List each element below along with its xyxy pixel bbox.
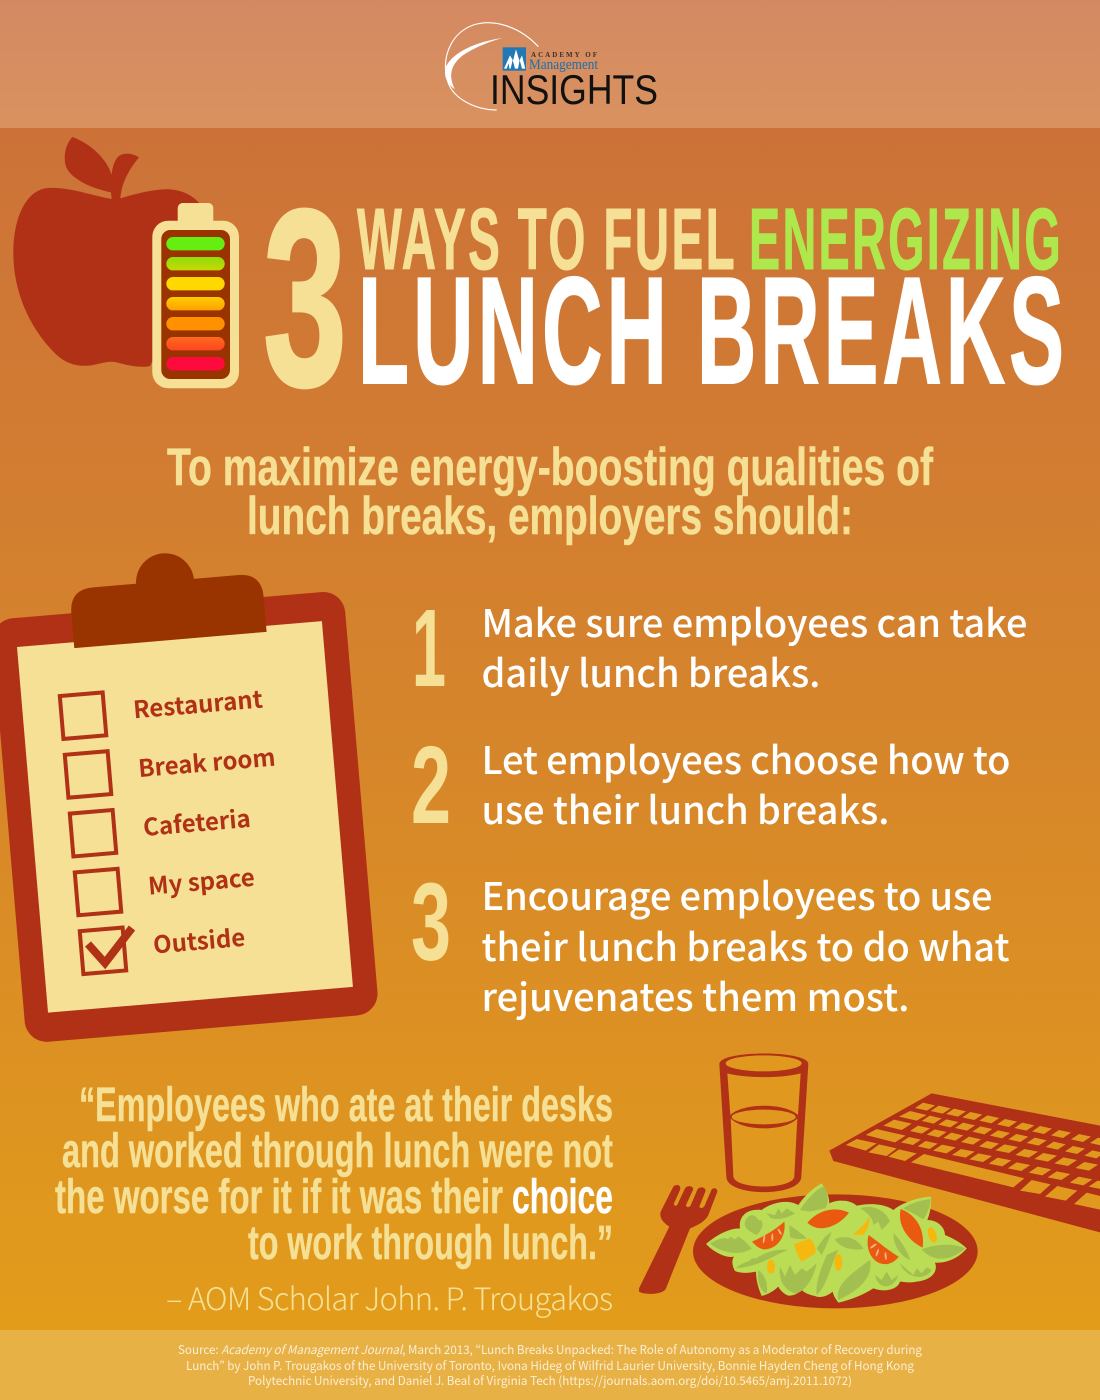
panel: clipboard checklist: Break room (137, 738, 277, 784)
icon: apple (13, 137, 200, 367)
illustration: lunch at desk (639, 1053, 1100, 1308)
top header band (0, 0, 1100, 128)
list item 1: Make sure employees can take (482, 593, 1028, 648)
source citation: Lunch” by John P. Trougakos of the University of Toronto, Ivona Hideg of Wilfrid Laurier University, Bonnie Hayden Cheng of Hong Kong (186, 1357, 914, 1374)
list item 1 (482, 593, 1028, 698)
subheading: lunch breaks, employers should: (247, 487, 853, 546)
panel: clipboard checklist: Outside (152, 918, 246, 960)
list item 2 (482, 730, 1010, 835)
panel: clipboard checklist: My space (147, 858, 256, 902)
quote (55, 1079, 613, 1270)
panel: clipboard checklist: Restaurant (132, 679, 264, 725)
icon: battery (152, 203, 239, 388)
title numeral 3: 3 (263, 158, 347, 439)
quote: choice (512, 1171, 613, 1224)
list item 3 (482, 866, 1010, 1022)
quote: “Employees who ate at their desks (79, 1079, 613, 1132)
quote: the worse for it if it was their (55, 1171, 503, 1224)
list item 3: rejuvenates them most. (482, 967, 910, 1022)
title line 1: WAYS TO FUEL (357, 191, 737, 288)
title line 2: LUNCH (358, 246, 671, 416)
subheading (167, 438, 933, 546)
list item 2: use their lunch breaks. (482, 780, 890, 835)
panel: clipboard checklist: Cafeteria (142, 799, 252, 843)
logo: Academy of Management Insights: ACADEMY OF (531, 51, 597, 59)
quote attribution: – AOM Scholar John. P. Trougakos (166, 1274, 613, 1319)
list item 3: their lunch breaks to do what (482, 917, 1010, 972)
list numeral 3: 3 (411, 861, 451, 984)
list numeral 1: 1 (412, 587, 446, 710)
list item 2: Let employees choose how to (482, 730, 1010, 785)
list numeral 2: 2 (411, 724, 451, 847)
source citation: Source: Academy of Management Journal, March 2013, “Lunch Breaks Unpacked: The Role of Autonomy as a Moderator of Recovery during (178, 1341, 922, 1358)
list item 1: daily lunch breaks. (482, 643, 820, 698)
source citation: Polytechnic University, and Daniel J. Beal of Virginia Tech (https://journals.aom.org/doi/10.5465/amj.2011.1072) (248, 1372, 852, 1389)
source citation (178, 1341, 922, 1389)
list item 3: Encourage employees to use (482, 866, 992, 921)
quote: and worked through lunch were not (62, 1125, 613, 1178)
quote: to work through lunch.” (248, 1217, 613, 1270)
icon: check mark (88, 928, 132, 963)
logo: Academy of Management Insights: INSIGHTS (490, 66, 658, 113)
footer band (0, 1330, 1100, 1400)
logo: Academy of Management Insights (445, 23, 658, 113)
logo: Academy of Management Insights: Management (529, 57, 599, 73)
panel: clipboard checklist (0, 538, 379, 1044)
